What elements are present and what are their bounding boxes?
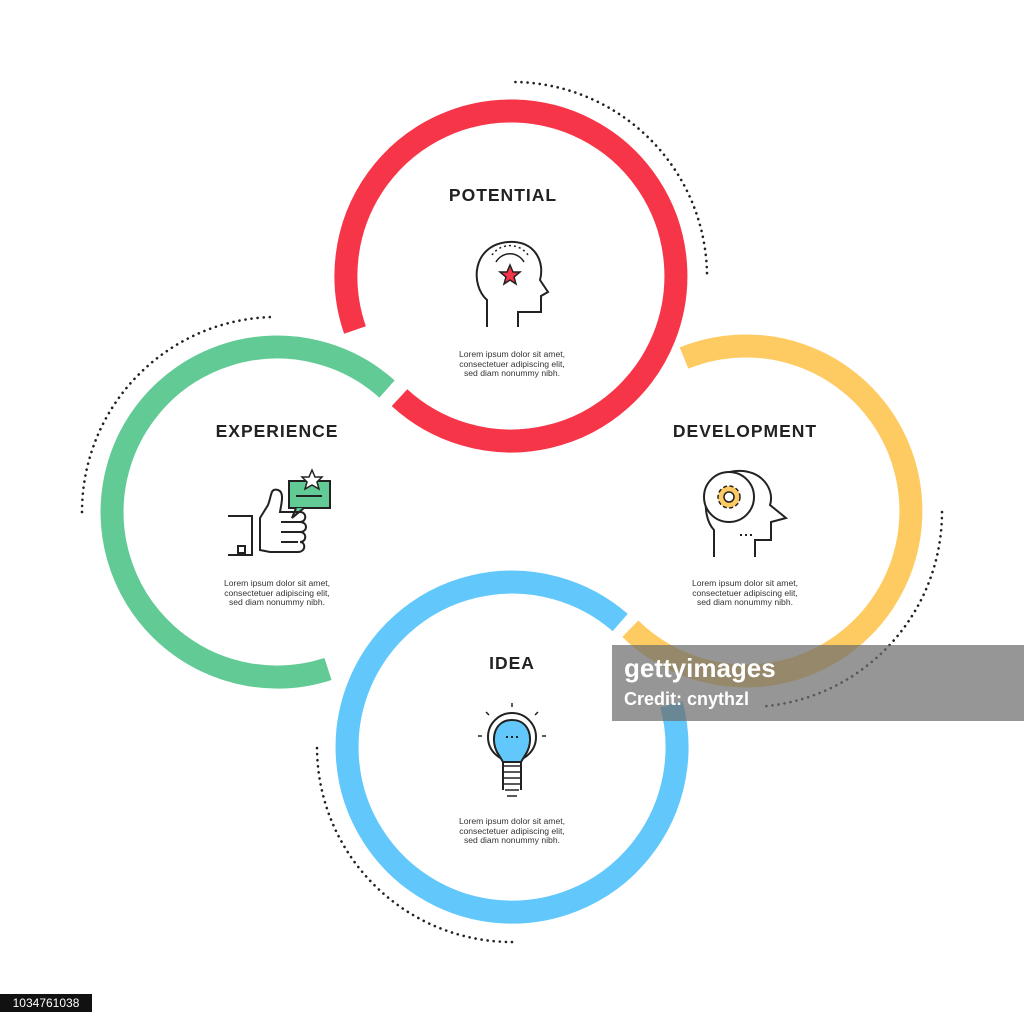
text: development body: Lorem ipsum dolor sit amet, xyxy=(692,578,798,588)
text: potential body: sed diam nonummy nibh. xyxy=(464,368,560,378)
icon: head with gear xyxy=(704,471,786,557)
watermark: Credit: cnythzl xyxy=(624,689,749,709)
watermark xyxy=(612,645,1024,721)
text: potential body xyxy=(459,349,565,378)
title: idea: IDEA xyxy=(489,653,535,673)
text: experience body: sed diam nonummy nibh. xyxy=(229,597,325,607)
icon: head with star xyxy=(477,242,548,327)
text: idea body xyxy=(459,816,565,845)
text: development body: sed diam nonummy nibh. xyxy=(697,597,793,607)
icon: thumbs up with message xyxy=(228,470,330,555)
text: experience body: Lorem ipsum dolor sit amet, xyxy=(224,578,330,588)
title: development: DEVELOPMENT xyxy=(673,421,817,441)
ring: experience green xyxy=(112,347,387,677)
title: experience: EXPERIENCE xyxy=(216,421,338,441)
ring: potential red xyxy=(346,111,676,441)
title: potential: POTENTIAL xyxy=(449,185,557,205)
ring: idea blue xyxy=(347,582,677,912)
text: potential body: consectetuer adipiscing elit, xyxy=(459,359,565,369)
dotted arcs xyxy=(82,82,942,942)
text: potential body: Lorem ipsum dolor sit amet, xyxy=(459,349,565,359)
text: development body: consectetuer adipiscing elit, xyxy=(692,588,798,598)
id label: 1034761038 xyxy=(13,996,79,1010)
text: experience body xyxy=(224,578,330,607)
text: development body xyxy=(692,578,798,607)
text: experience body: consectetuer adipiscing elit, xyxy=(224,588,330,598)
text: idea body: Lorem ipsum dolor sit amet, xyxy=(459,816,565,826)
text: idea body: sed diam nonummy nibh. xyxy=(464,835,560,845)
ring: development yellow xyxy=(630,346,911,676)
icon: light bulb xyxy=(478,703,546,796)
watermark: gettyimages xyxy=(624,653,776,683)
text: idea body: consectetuer adipiscing elit, xyxy=(459,826,565,836)
id label xyxy=(0,994,92,1012)
